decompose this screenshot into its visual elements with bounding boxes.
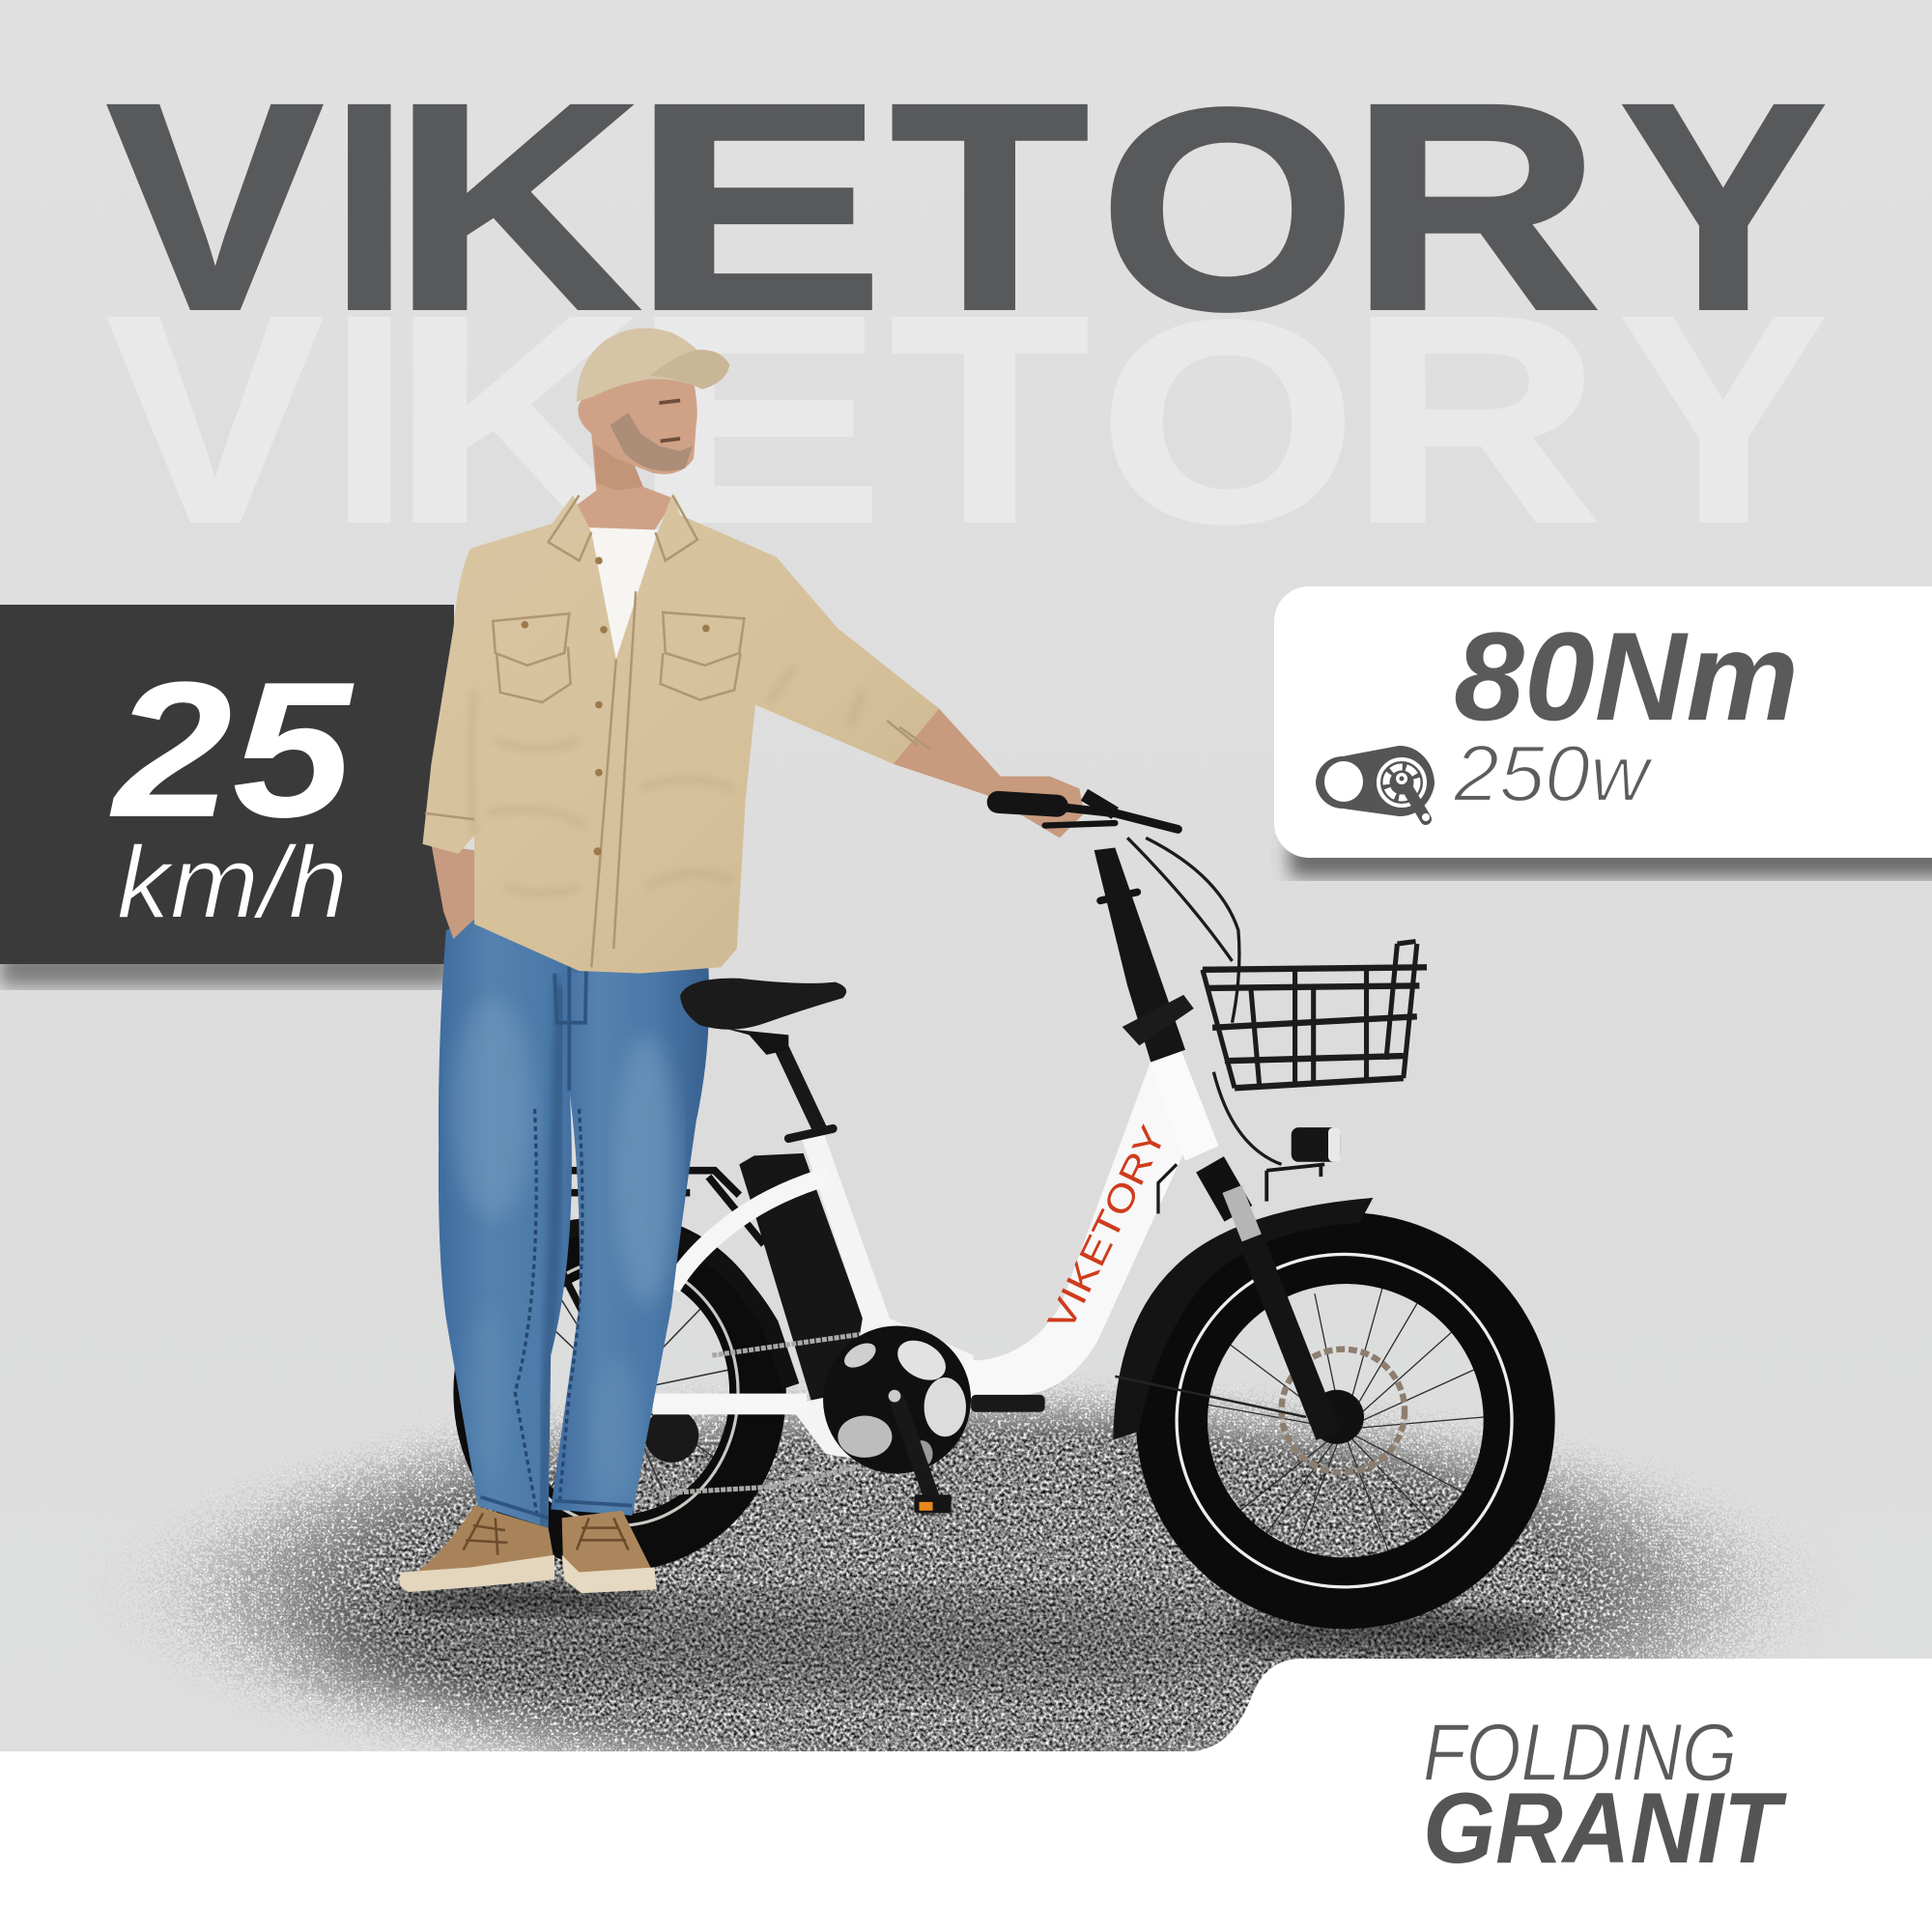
shoe: right	[562, 1511, 657, 1593]
shirt	[422, 493, 939, 974]
stem and folding joint	[1094, 848, 1190, 1062]
title reflection: VIKETORY	[107, 255, 1827, 583]
chain	[659, 1334, 863, 1493]
eye and mouth	[659, 401, 680, 441]
footboard	[971, 1395, 1045, 1412]
frame: seat tube	[788, 1131, 974, 1460]
e-bike	[482, 838, 1542, 1616]
title: VIKETORY: O	[1099, 48, 1356, 369]
title: VIKETORY: V	[107, 43, 325, 371]
battery	[739, 1153, 865, 1407]
asphalt ground patch	[19, 1348, 1922, 1840]
man	[399, 328, 1178, 1593]
icon: mid-drive motor	[1316, 746, 1435, 821]
power value: 250w	[1453, 728, 1654, 818]
model label: folding: FOLDING	[1423, 1707, 1737, 1798]
cap	[577, 328, 729, 402]
front fork	[1115, 1164, 1328, 1435]
seat post	[781, 1047, 833, 1139]
shirt buttons	[522, 557, 710, 855]
title: VIKETORY: I	[331, 43, 408, 371]
title reflection: VIKETORY: R	[1350, 255, 1601, 583]
title reflection: VIKETORY: T	[891, 255, 1089, 583]
speed value: 25	[109, 642, 355, 858]
speed unit: km/h	[117, 826, 348, 940]
title: VIKETORY: E	[632, 43, 885, 371]
frame: chain stay	[653, 1394, 807, 1414]
cap brim shade	[649, 350, 729, 389]
frame: upper stay	[671, 1176, 831, 1288]
frame logo: VIKETORY: VIKETORY	[1040, 1120, 1175, 1337]
title: VIKETORY: R	[1350, 43, 1601, 371]
title: VIKETORY	[107, 43, 1827, 371]
title reflection: VIKETORY: I	[331, 256, 408, 583]
right forearm and hand	[894, 708, 1084, 838]
rear wheel	[482, 1242, 757, 1543]
saddle	[680, 979, 846, 1030]
headlight	[1266, 1127, 1341, 1202]
title reflection: VIKETORY: E	[632, 255, 885, 583]
jeans: left leg	[439, 918, 616, 1528]
title: VIKETORY: Y	[1620, 43, 1827, 371]
shirt shading	[471, 666, 863, 894]
title reflection: VIKETORY: O	[1099, 261, 1356, 582]
chainring and crank	[823, 1325, 971, 1513]
frame: step-through down tube	[966, 1061, 1185, 1427]
bottom white band	[0, 1659, 1932, 1932]
front fender	[1117, 1202, 1368, 1435]
neck and head	[577, 363, 697, 532]
title reflection: VIKETORY: K	[392, 255, 640, 583]
cables	[1127, 838, 1282, 1213]
frame: head tube	[1151, 1048, 1218, 1161]
torque value: 80Nm	[1454, 606, 1799, 747]
panel: speed	[0, 605, 454, 986]
jeans fading and stitching	[451, 955, 679, 1528]
title: VIKETORY: K	[392, 43, 640, 371]
title: VIKETORY: T	[891, 43, 1089, 371]
beard	[610, 412, 693, 471]
shoe: left	[399, 1506, 554, 1592]
shirt details	[425, 496, 930, 967]
t-shirt	[582, 527, 658, 659]
left hand in pocket	[431, 844, 475, 939]
title reflection: VIKETORY: V	[107, 255, 325, 583]
panel: torque and power	[1274, 586, 1932, 877]
model label: granit: GRANIT	[1423, 1773, 1787, 1885]
title reflection: VIKETORY: Y	[1620, 256, 1827, 583]
handlebar and grip	[998, 795, 1178, 829]
rear fender and rack	[532, 1171, 791, 1386]
basket	[1203, 941, 1427, 1088]
front wheel	[1150, 1226, 1542, 1616]
saddle clamp	[727, 1029, 788, 1055]
jeans: right leg	[551, 967, 709, 1516]
neck shadow	[594, 443, 643, 491]
